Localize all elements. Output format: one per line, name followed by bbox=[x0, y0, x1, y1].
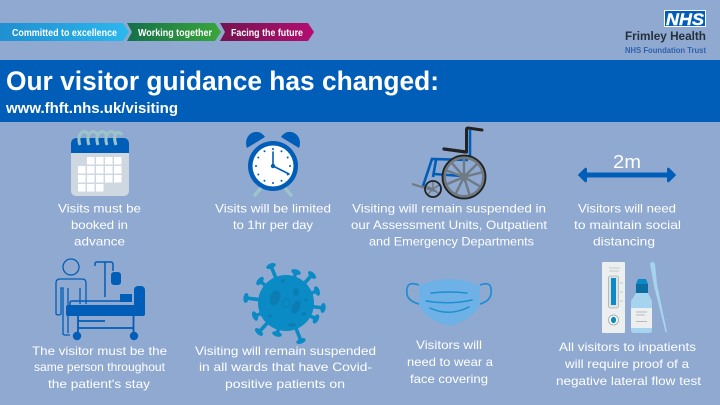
panel: face covering bbox=[407, 279, 493, 386]
text: remain suspended: and Emergency Departments bbox=[369, 234, 534, 248]
values ribbon bbox=[0, 23, 314, 41]
text: same person: same person throughout bbox=[34, 360, 166, 374]
logo: Frimley Health NHS: Frimley Health bbox=[625, 29, 706, 43]
logo: Frimley Health NHS: NHS Foundation Trust bbox=[625, 45, 706, 55]
text: negative test: negative lateral flow test bbox=[556, 374, 702, 388]
url: www.fhft.nhs.uk/visiting bbox=[5, 100, 178, 117]
icon: virus bbox=[243, 262, 326, 345]
text: limited to 1hr bbox=[215, 202, 331, 232]
logo: Frimley Health NHS: NHS bbox=[666, 10, 705, 29]
text: maintain distancing: to maintain social bbox=[574, 218, 681, 232]
icon: calendar bbox=[71, 132, 129, 196]
panel: suspended departments bbox=[351, 128, 548, 248]
text: wear face covering: Visitors will bbox=[416, 338, 482, 352]
text: same person: the patient's stay bbox=[48, 377, 150, 391]
text: covid wards: in all wards that have Covid- bbox=[199, 360, 372, 374]
logo: Frimley Health NHS bbox=[625, 10, 706, 55]
text: maintain distancing: Visitors will need bbox=[578, 202, 676, 216]
text: negative test: All visitors to inpatients bbox=[559, 340, 696, 354]
title: Our visitor guidance has changed: bbox=[6, 66, 439, 96]
panel: social distancing bbox=[574, 152, 681, 248]
ribbon: committed to excellence: Committed to excellence bbox=[12, 28, 117, 39]
icon: test kit bbox=[602, 262, 667, 333]
text: negative test bbox=[556, 340, 702, 388]
heading banner bbox=[0, 60, 720, 122]
text: maintain distancing: distancing bbox=[593, 234, 655, 248]
text: same person: The visitor must be the bbox=[32, 344, 167, 358]
panel: lateral flow test bbox=[556, 262, 702, 388]
panel: covid wards bbox=[195, 262, 376, 391]
panel: same person bbox=[32, 259, 167, 391]
ribbon: facing the future bbox=[220, 23, 314, 41]
text: visits must be booked: Visits must be bbox=[58, 202, 141, 216]
icon: face mask bbox=[407, 279, 491, 326]
text: wear face covering bbox=[407, 338, 493, 386]
icon: visitor and hospital bed bbox=[56, 259, 145, 340]
text: visits must be booked bbox=[58, 202, 141, 248]
text: wear face covering: face covering bbox=[410, 372, 488, 386]
text: same person bbox=[32, 344, 167, 391]
icon: alarm clock bbox=[246, 132, 300, 195]
text: covid wards bbox=[195, 344, 376, 391]
text: wear face covering: need to wear a bbox=[407, 355, 493, 369]
text: visits must be booked: booked in bbox=[71, 218, 128, 232]
text: remain suspended bbox=[351, 202, 548, 248]
text: remain suspended: our Assessment Units, Outpatient bbox=[351, 218, 548, 232]
ribbon: working together: Working together bbox=[138, 28, 212, 39]
text: negative test: will require proof of a bbox=[564, 357, 689, 371]
ribbon: working together bbox=[127, 23, 221, 41]
text: limited to 1hr: Visits will be limited bbox=[215, 202, 331, 216]
text: remain suspended: Visiting will remain suspended in bbox=[352, 202, 546, 216]
ribbon: committed to excellence bbox=[0, 23, 129, 41]
text: limited to 1hr: to 1hr per day bbox=[233, 218, 313, 232]
text: visits must be booked: advance bbox=[74, 234, 125, 248]
panel: limited time bbox=[215, 132, 331, 232]
text: covid wards: Visiting will remain suspended bbox=[195, 344, 376, 358]
ribbon: facing the future: Facing the future bbox=[231, 28, 303, 39]
text: maintain distancing bbox=[574, 202, 681, 248]
text: covid wards: positive patients on bbox=[225, 377, 345, 391]
panel: booked in advance bbox=[58, 132, 141, 248]
icon: two metre arrow: 2m bbox=[613, 152, 641, 172]
icon: wheelchair bbox=[412, 128, 486, 198]
